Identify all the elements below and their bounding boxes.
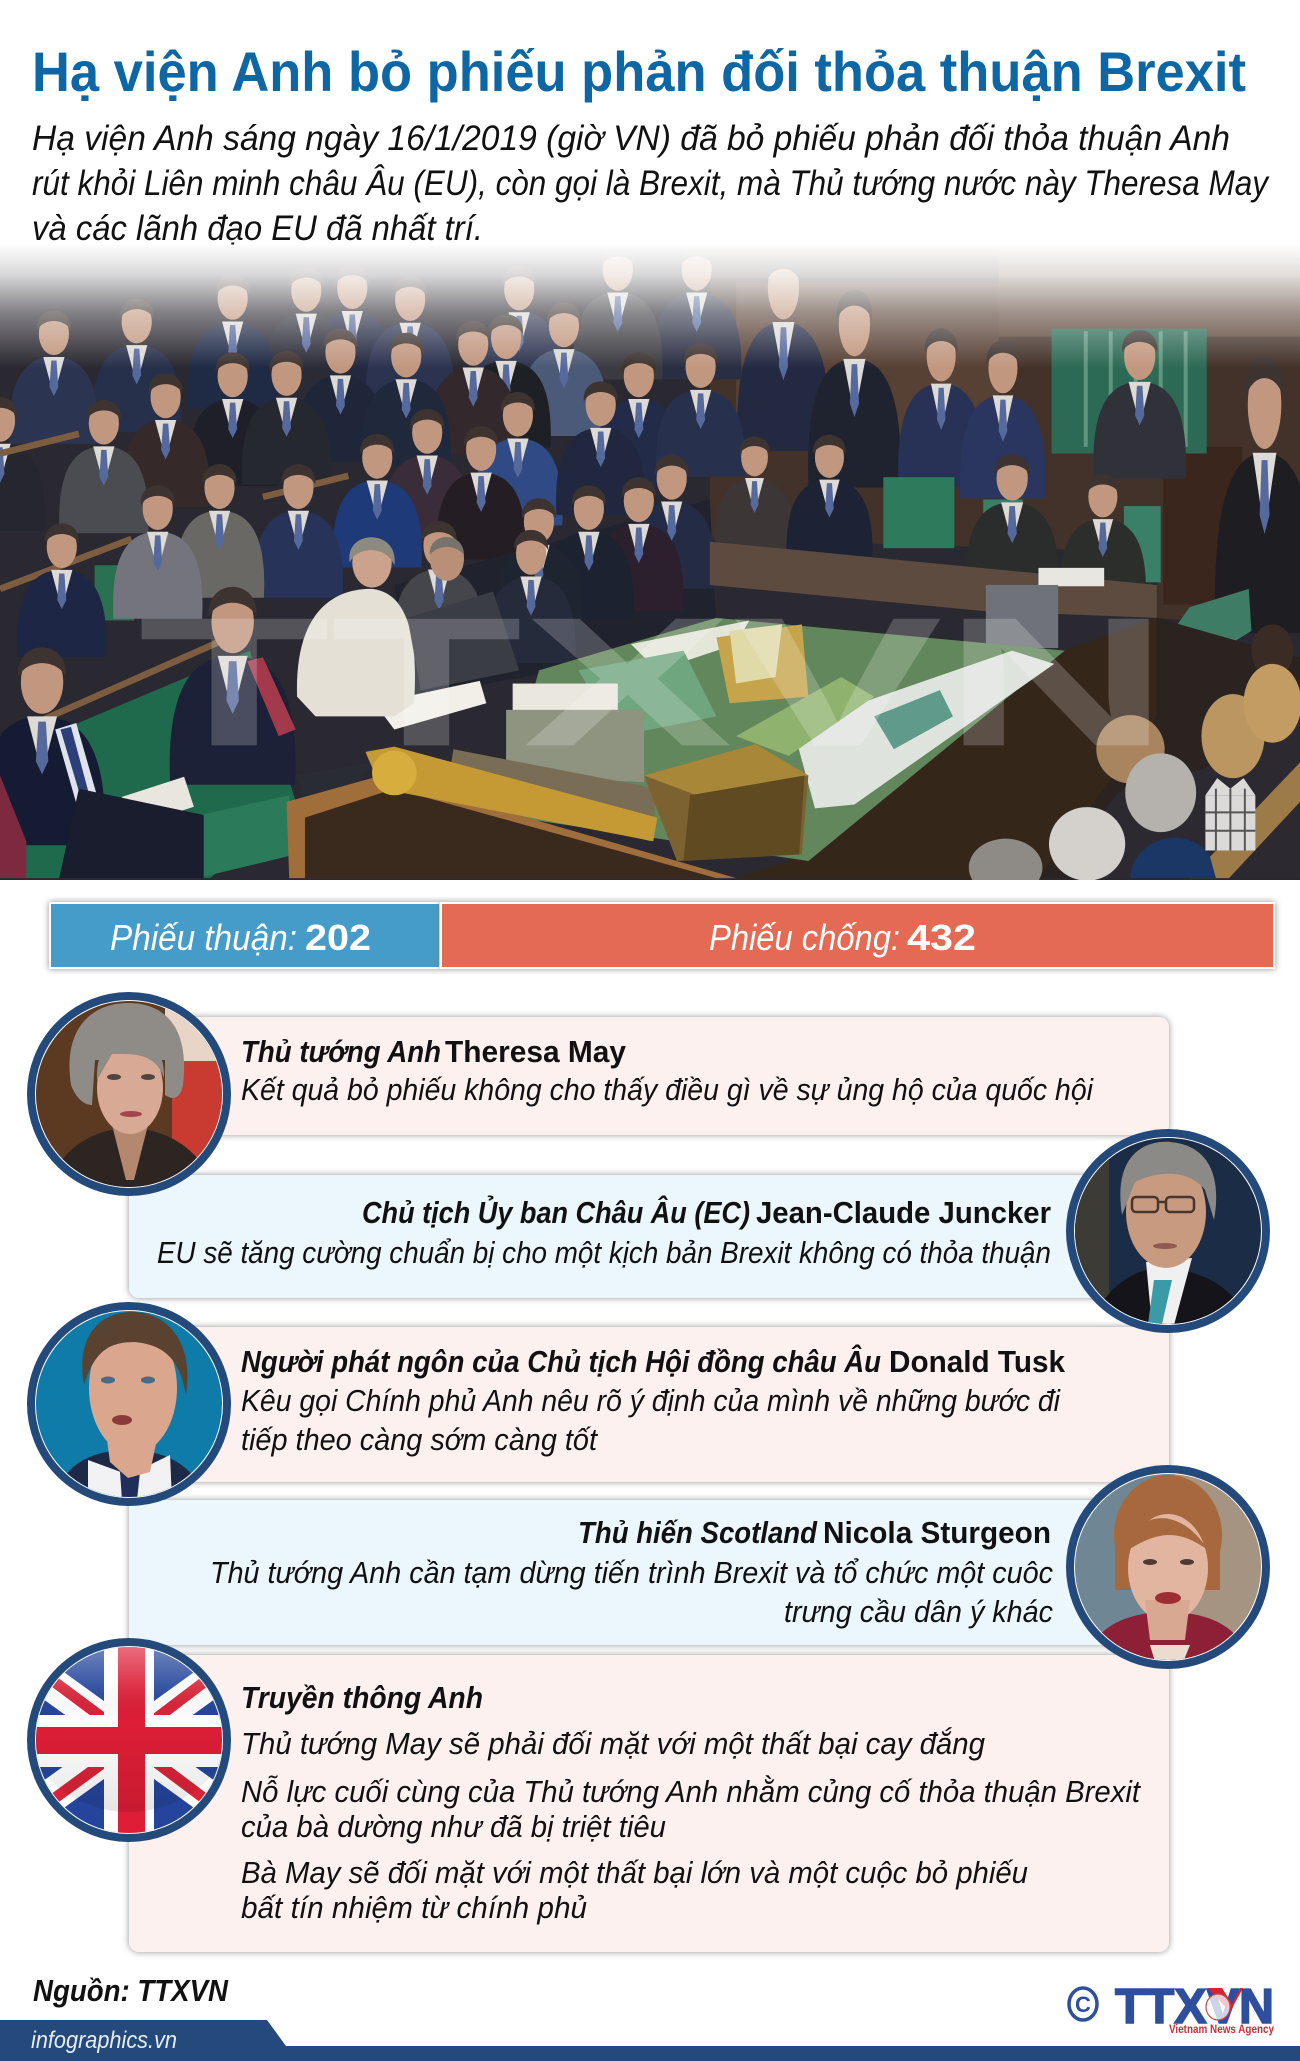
speaker canopy green (1052, 329, 1207, 454)
panel: Donald Tusk (129, 1327, 1169, 1482)
panel: British media: Bà May sẽ đối mặt với một thất bại lớn và một cuộc bỏ phiếu (241, 1855, 1028, 1890)
portrait: Theresa May (31, 996, 227, 1192)
panel: British media: Thủ tướng May sẽ phải đối mặt với một thất bại cay đắng (241, 1726, 985, 1761)
votes in favour (50, 903, 440, 968)
panel: Jean-Claude Juncker: Jean-Claude Juncker (756, 1195, 1051, 1230)
panel: Donald Tusk: Kêu gọi Chính phủ Anh nêu rõ ý định của mình về những bước đi (241, 1383, 1061, 1418)
front row (170, 587, 296, 785)
votes in favour: Phiếu thuận: (110, 917, 297, 958)
logo: TTXVN: C (1075, 1992, 1091, 2017)
panel: Theresa May: Theresa May (445, 1034, 627, 1069)
mace (365, 747, 657, 841)
footer bar (0, 2020, 1300, 2061)
panel: Jean-Claude Juncker (129, 1175, 1169, 1298)
source: Nguồn: TTXVN (33, 1973, 229, 2008)
votes against: 432 (907, 917, 976, 958)
panel: Theresa May: Thủ tướng Anh (241, 1034, 441, 1069)
panel: British media: Truyền thông Anh (241, 1680, 483, 1715)
photo: House of Commons chamber (0, 243, 1300, 896)
clerks and green chairs (883, 477, 954, 548)
logo: TTXVN: TTXVN (1115, 1980, 1274, 2034)
panel: British media: Nỗ lực cuối cùng của Thủ tướng Anh nhằm củng cố thỏa thuận Brexit (241, 1774, 1141, 1809)
panel: Theresa May: Kết quả bỏ phiếu không cho thấy điều gì về sự ủng hộ của quốc hội (241, 1072, 1094, 1107)
votes against: Phiếu chống: (709, 917, 900, 958)
intro paragraph: Hạ viện Anh sáng ngày 16/1/2019 (giờ VN) đã bỏ phiếu phản đối thỏa thuận Anh (32, 119, 1230, 158)
panel: Theresa May (129, 1017, 1169, 1135)
panel: Nicola Sturgeon: trưng cầu dân ý khác (784, 1594, 1053, 1629)
benches wood (0, 434, 348, 739)
vote result bar (50, 903, 1274, 968)
panel: British media (129, 1655, 1169, 1952)
panel: Nicola Sturgeon (129, 1500, 1169, 1645)
portrait: Donald Tusk (31, 1306, 227, 1502)
green bench (0, 651, 296, 878)
portrait: Jean-Claude Juncker (1070, 1133, 1266, 1330)
panel: Donald Tusk: Donald Tusk (889, 1344, 1066, 1379)
votes against (441, 903, 1274, 968)
panel: Nicola Sturgeon: Thủ hiến Scotland (578, 1515, 818, 1550)
icon: UK flag (27, 1638, 231, 1842)
intro paragraph (32, 119, 1270, 248)
table right side wood (736, 618, 1157, 878)
back rows (0, 246, 1300, 633)
panel: Nicola Sturgeon: Thủ tướng Anh cần tạm dừng tiến trình Brexit và tổ chức một cuôc (210, 1555, 1053, 1590)
table front (287, 776, 736, 878)
panel: Donald Tusk: tiếp theo càng sớm càng tốt (241, 1422, 598, 1457)
votes in favour: 202 (305, 917, 371, 958)
panel: Donald Tusk: Người phát ngôn của Chủ tịch Hội đồng châu Âu (241, 1343, 881, 1379)
logo: TTXVN: Vietnam News Agency (1169, 2024, 1275, 2036)
audience lower right (969, 624, 1300, 896)
portrait: Nicola Sturgeon (1070, 1469, 1266, 1665)
panel: Jean-Claude Juncker: EU sẽ tăng cường chuẩn bị cho một kịch bản Brexit không có thỏa thuận (157, 1235, 1051, 1270)
panel: Jean-Claude Juncker: Chủ tịch Ủy ban Châu Âu (EC) (362, 1194, 750, 1230)
top fade (0, 243, 1300, 368)
table papers (500, 618, 1065, 861)
watermark: TTXVN (138, 578, 1170, 784)
despatch box (644, 744, 808, 861)
clerks table (710, 542, 1157, 618)
panel: British media: bất tín nhiệm từ chính phủ (241, 1890, 587, 1925)
panel: British media: của bà dường như đã bị triệt tiêu (241, 1809, 666, 1844)
panel: Nicola Sturgeon: Nicola Sturgeon (823, 1515, 1051, 1550)
intro paragraph: và các lãnh đạo EU đã nhất trí. (32, 209, 483, 248)
title: Hạ viện Anh bỏ phiếu phản đối thỏa thuận Brexit (32, 40, 1246, 103)
footer bar: infographics.vn (31, 2027, 177, 2054)
